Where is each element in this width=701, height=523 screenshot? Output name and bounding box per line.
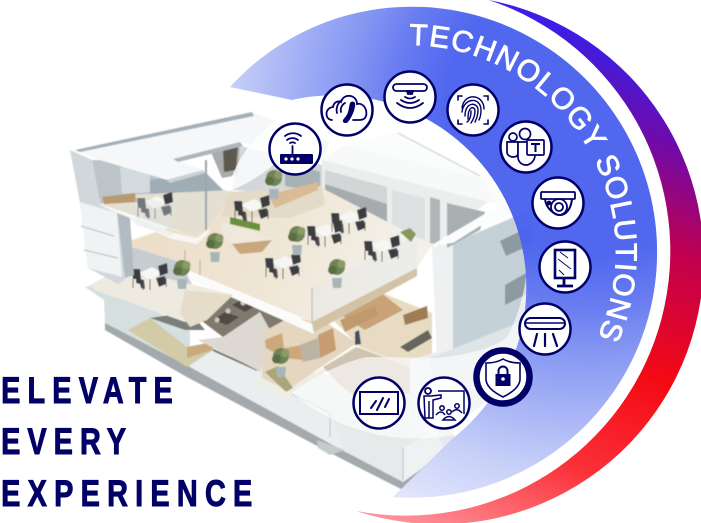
planter [272,348,290,377]
icon: cloud phone [322,84,372,136]
lower cafe level [190,295,330,373]
icon: dome camera [532,178,584,228]
blue gradient band [230,7,657,498]
icon: microsoft teams [500,122,552,172]
ground slab [105,320,455,490]
title: elevate every experience: ELEVATE [1,371,173,412]
title: elevate every experience: EXPERIENCE [1,474,252,515]
upper left roof [75,112,330,183]
kitchen level [258,317,357,398]
upper left floor [92,142,240,244]
right interior room [323,292,432,400]
overlay lens at roof [227,112,290,192]
icon: classroom presenter [418,378,470,428]
building cutaway illustration [70,112,590,490]
icon: air conditioning [520,304,570,354]
translucent overlay crescent [292,55,608,438]
glass-walled garden level [85,282,213,367]
lower left floor [90,245,233,327]
curved heading: technology solutions: TECHNOLOGY SOLUTIONS [410,24,638,342]
upper right roof [322,132,532,245]
left wall [70,150,134,284]
icon: fingerprint [448,84,498,136]
icon: security shield [476,350,530,404]
icon: wifi router [270,124,320,174]
title: elevate every experience: EVERY [1,422,126,463]
title: elevate every experience [1,371,252,515]
icon: interactive display [354,378,404,428]
top floor back wall and windows [232,146,490,248]
right block wall [410,208,590,432]
icon: digital kiosk [540,242,590,292]
main terrace deck [123,170,432,334]
red gradient crescent [356,0,701,523]
icon: ceiling sensor [384,72,436,122]
